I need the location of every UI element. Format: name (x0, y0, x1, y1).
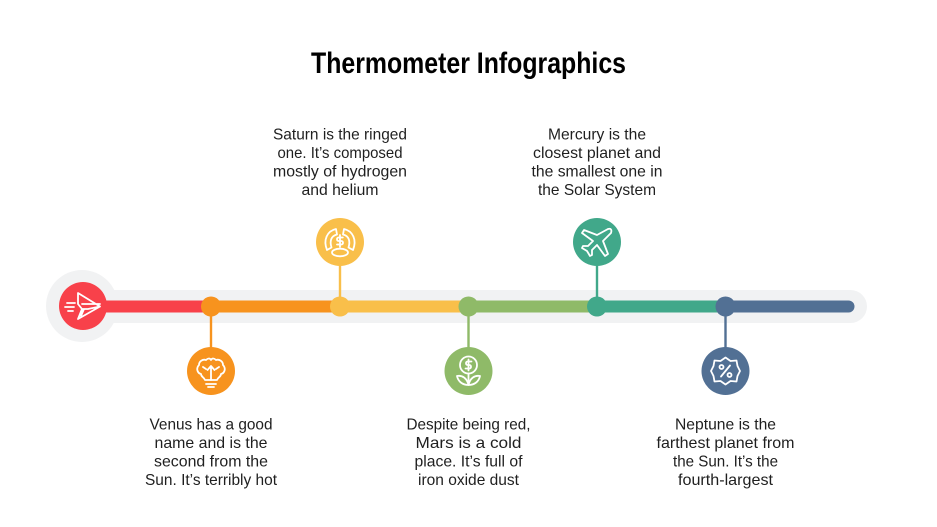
icon: airplane (573, 218, 621, 266)
Mercury text: the smallest one in (532, 164, 662, 180)
Neptune text: the Sun. It’s the (673, 454, 778, 470)
Mars marker and connector (458, 296, 478, 351)
Neptune text: fourth-largest (678, 472, 774, 489)
Saturn text: and helium (302, 182, 378, 199)
Venus text: name and is the (154, 435, 268, 452)
step: Venus (145, 296, 278, 489)
Venus text (145, 416, 278, 489)
Venus text: second from the (154, 454, 268, 470)
step: Saturn (273, 126, 407, 316)
Mercury text: Mercury is the (548, 126, 646, 144)
Mercury marker and connector (587, 262, 607, 316)
Mars text: Mars is a cold (416, 435, 522, 452)
Venus marker and connector (201, 296, 221, 351)
Neptune text: farthest planet from (656, 435, 794, 452)
Saturn text: Saturn is the ringed (273, 126, 407, 144)
Neptune text (656, 416, 794, 489)
Venus text: Venus has a good (150, 416, 272, 434)
Mercury text: closest planet and (533, 145, 661, 162)
icon: percent badge (702, 347, 750, 395)
Mars text: place. It’s full of (414, 454, 523, 470)
Saturn text: mostly of hydrogen (273, 164, 407, 180)
step: Mars (406, 296, 530, 489)
Mars text (406, 416, 530, 489)
icon: brain bulb (187, 347, 235, 395)
title: Thermometer Infographics (311, 47, 626, 80)
icon: dollar ring (316, 218, 364, 266)
Saturn marker and connector (330, 262, 350, 316)
Saturn text (273, 126, 407, 199)
Neptune text: Neptune is the (675, 416, 776, 434)
Neptune marker and connector (716, 296, 736, 351)
thermometer track (46, 270, 867, 342)
Saturn text: one. It’s composed (278, 145, 402, 162)
step: Mercury (532, 126, 662, 316)
Mars text: Despite being red, (406, 416, 530, 434)
thermometer coloured bar (83, 300, 854, 312)
Mercury text: the Solar System (538, 182, 656, 199)
Mars text: iron oxide dust (418, 472, 520, 489)
Venus text: Sun. It’s terribly hot (145, 472, 278, 489)
icon: paper plane bulb (59, 282, 107, 330)
icon: money plant (444, 347, 492, 395)
step: Neptune (656, 296, 794, 489)
Mercury text (532, 126, 662, 199)
